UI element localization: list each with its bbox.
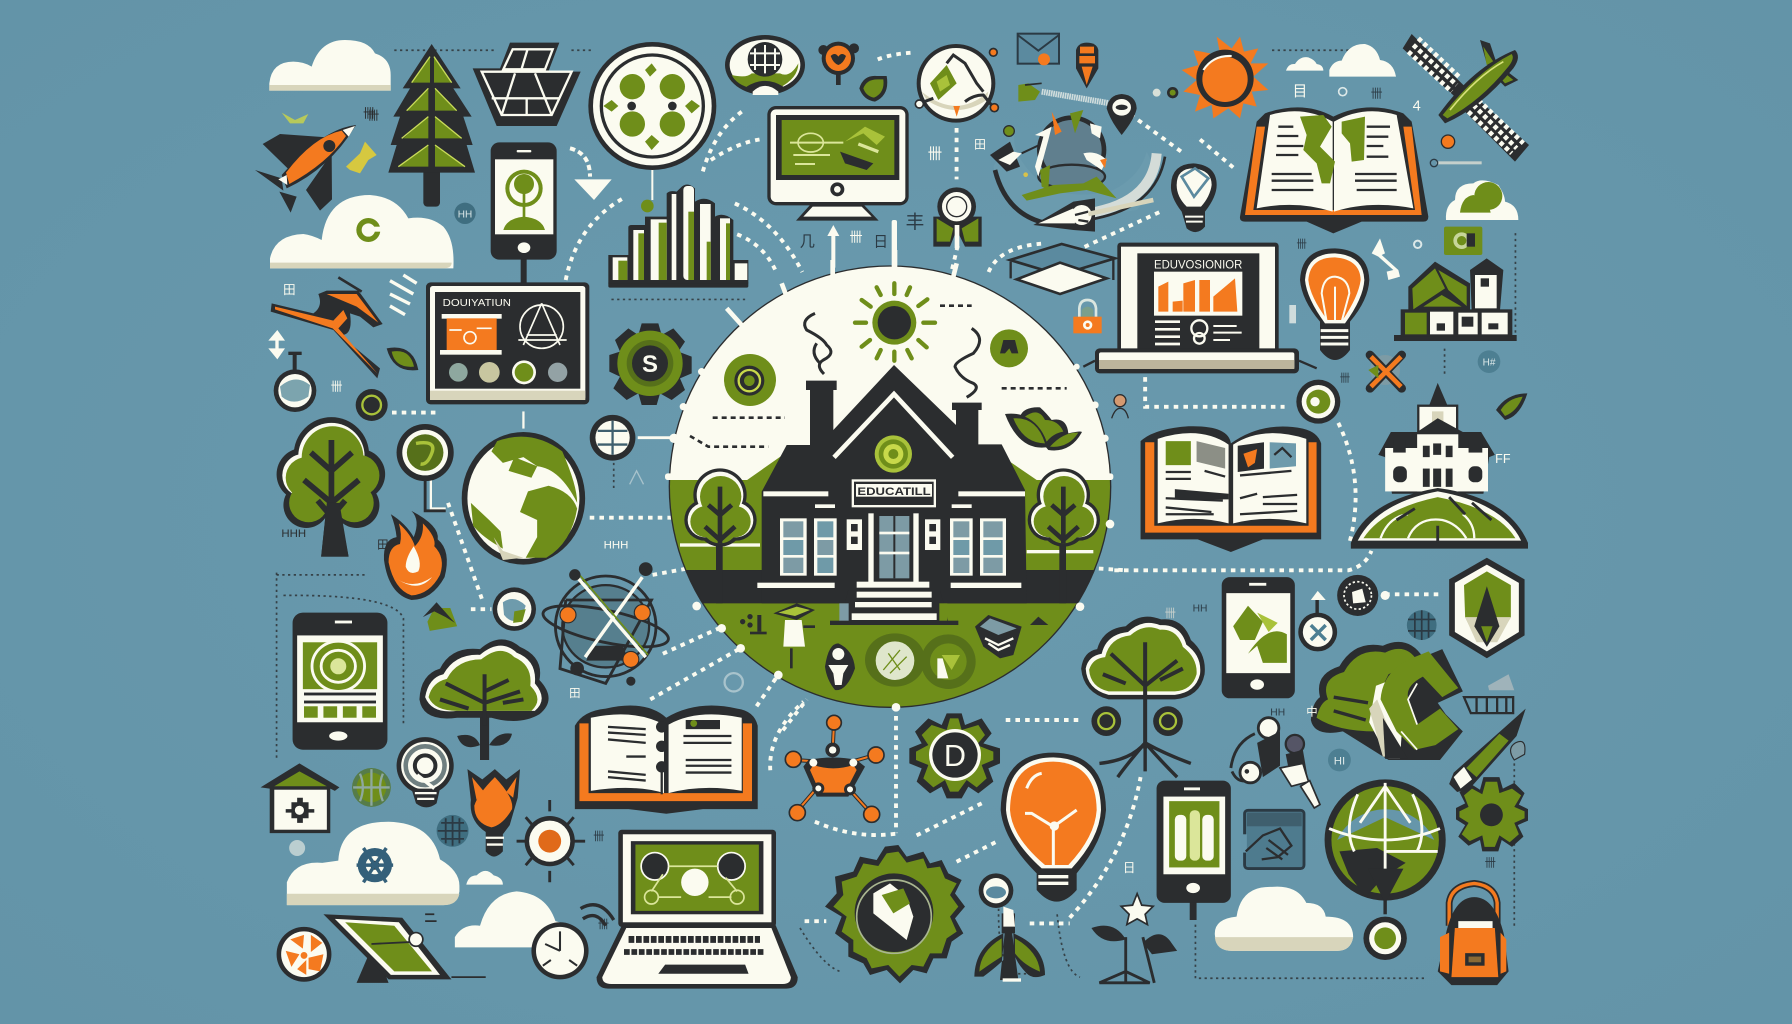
- tiny marks: [283, 108, 379, 394]
- shelf: [1464, 674, 1514, 713]
- white bulb: [1171, 163, 1217, 232]
- door: [857, 513, 929, 588]
- lens pointer: [1298, 591, 1337, 651]
- round chip: HH: [458, 209, 472, 220]
- farm buildings: [1394, 258, 1517, 341]
- windows: [780, 518, 1006, 576]
- double arrow: [268, 330, 285, 359]
- small cloud: [466, 871, 503, 885]
- green tree and gear letter C: [1311, 642, 1463, 760]
- solar panel lower: [323, 914, 486, 983]
- tiny marks: [800, 137, 986, 251]
- lens: [274, 352, 316, 412]
- orange sun: [1182, 37, 1268, 118]
- large mesh globe: [1325, 779, 1446, 914]
- gear D: D: [944, 739, 966, 773]
- school building: [740, 365, 1042, 625]
- tiny marks: 日: [873, 235, 888, 251]
- round emblem: [588, 42, 716, 212]
- handshake panel: [1241, 810, 1304, 869]
- tiny marks: 卌: [928, 145, 942, 162]
- tiny marks: 目: [1293, 84, 1307, 100]
- fuzzy eye right: [1153, 706, 1183, 736]
- right open book: [1141, 426, 1321, 552]
- envelope: [1018, 34, 1059, 65]
- clock: [531, 922, 589, 979]
- tiny marks: 卌: [367, 108, 379, 122]
- rocket plane: [255, 125, 356, 213]
- laptop with chart: EDUVOSIONIOR: [1154, 257, 1243, 271]
- heart pin: [818, 42, 859, 85]
- left tree: [277, 417, 385, 557]
- down arrow: [570, 148, 612, 200]
- sun in hub: [855, 283, 935, 361]
- gear S: S: [642, 351, 658, 378]
- tiny marks: 卌: [849, 230, 863, 245]
- scattered micro marks: 卌: [1165, 607, 1176, 620]
- child figure: [825, 643, 855, 690]
- mini chip: HI: [1334, 756, 1345, 768]
- rim markers: [665, 250, 1114, 712]
- tablet target: [293, 613, 387, 750]
- hexagon badge: [1449, 558, 1525, 658]
- scattered micro marks: HHH: [281, 528, 306, 540]
- map circle: [915, 44, 998, 123]
- tiny marks: 卌: [1296, 238, 1307, 250]
- scattered micro marks: 田: [569, 688, 581, 700]
- satellite: [1403, 34, 1529, 167]
- mini chip: [1328, 749, 1351, 771]
- scattered micro marks: HH: [1270, 707, 1285, 718]
- globe eye bubble: [725, 35, 805, 95]
- orange drone: [271, 277, 383, 378]
- student figure with cap: [773, 603, 815, 668]
- smoke plumes: [805, 313, 980, 397]
- dashboard panel: [426, 282, 589, 404]
- school building: EDUCATILL: [857, 486, 931, 498]
- lower laptop: [597, 830, 798, 989]
- laptop with chart: [1083, 243, 1317, 373]
- scattered micro marks: FF: [1495, 452, 1511, 466]
- cloud top left: [269, 40, 391, 91]
- open book lower: [575, 706, 758, 814]
- lawn badges: [865, 633, 976, 689]
- school on hill: [1351, 383, 1528, 549]
- orange network star: [785, 715, 884, 822]
- olive gear: [1456, 777, 1528, 851]
- gear D: [909, 713, 1000, 798]
- scattered micro marks: 卌: [598, 918, 609, 931]
- small green house glyph: [423, 602, 457, 631]
- carrot badge: [1076, 43, 1098, 88]
- small leaf: [859, 76, 887, 102]
- scattered micro marks: 日: [1123, 861, 1135, 875]
- green badge left: [724, 354, 776, 406]
- up arrow: [827, 225, 839, 268]
- lower cloud: [455, 891, 576, 947]
- scattered micro marks: [281, 107, 1511, 931]
- scattered micro marks: 卌: [363, 107, 375, 121]
- big orange bulb: [1001, 753, 1106, 902]
- map book: [1240, 107, 1428, 233]
- right phone: [1222, 577, 1295, 698]
- small globe lens: [493, 587, 536, 631]
- ring bulb: [397, 737, 454, 807]
- teardrop pin: [1107, 94, 1137, 135]
- tiny marks: 4: [1413, 99, 1421, 115]
- orange dot: [989, 48, 998, 57]
- small mesh lens by hub: [590, 415, 635, 461]
- cloud with logo: [270, 195, 454, 268]
- small globe with connector: [397, 424, 454, 511]
- backpack: [1438, 883, 1509, 985]
- leaves: [1005, 407, 1082, 450]
- cloud with gear: [287, 822, 459, 905]
- solar panel top: [473, 43, 581, 126]
- clouds small: [1286, 44, 1396, 77]
- tiny marks: 几: [800, 234, 815, 251]
- leaf right: [1496, 393, 1527, 420]
- dashboard panel: DOUIYATIUN: [443, 298, 511, 309]
- grad box on lawn: [975, 615, 1022, 658]
- dashed marks: [690, 306, 1067, 447]
- chip globe: H#: [1483, 357, 1496, 368]
- person: [1112, 395, 1128, 418]
- large earth globe: [462, 411, 585, 565]
- turbine rocket figure: [974, 873, 1045, 982]
- stripes: [390, 275, 417, 315]
- green globe: [352, 768, 391, 807]
- scattered micro marks: 卌: [593, 830, 605, 843]
- tiny marks: 田: [974, 137, 986, 151]
- small house: [261, 763, 339, 833]
- earth mechanism: [990, 110, 1165, 226]
- flame icon: [384, 511, 447, 600]
- mini trio: [1153, 87, 1178, 98]
- seal green: [1296, 380, 1340, 424]
- dotted connector network: [277, 50, 1515, 978]
- phone top: [491, 142, 557, 283]
- green flag with white trail: [1018, 83, 1110, 103]
- pencil: [1449, 709, 1526, 792]
- round chip: [454, 203, 476, 224]
- scattered micro marks: 卌: [1485, 856, 1496, 869]
- green leaf: [387, 348, 418, 370]
- tiny marks: 卌: [331, 380, 343, 394]
- olive cloud: [1446, 180, 1518, 220]
- tiny marks: [1289, 84, 1421, 385]
- bar chart: [608, 185, 748, 288]
- fuzzy seal: [356, 389, 388, 421]
- scattered micro marks: HHH: [604, 540, 628, 552]
- white arrow squiggle: [1372, 238, 1400, 280]
- graduation cap: [1010, 244, 1115, 294]
- tiny marks: 丰: [906, 211, 924, 232]
- olive tile: [1444, 227, 1482, 255]
- padlock: [1073, 300, 1102, 333]
- scattered micro marks: HH: [1193, 603, 1207, 614]
- scattered micro marks: 田: [377, 540, 389, 552]
- central school hub: [665, 250, 1114, 712]
- green badge right: [990, 329, 1028, 367]
- lawn marks: [740, 614, 1048, 634]
- ring node: [1363, 917, 1407, 960]
- crossed tools: [1368, 355, 1402, 388]
- tree with roots: [1081, 617, 1205, 777]
- orange fruit circle: [277, 927, 331, 982]
- blue globe: [437, 815, 469, 847]
- yellow sparkle shapes: [282, 113, 377, 173]
- mesh globe: [1407, 610, 1437, 640]
- right schoolyard tree: [1028, 468, 1100, 603]
- steps: [830, 590, 958, 625]
- lower right cloud: [1215, 887, 1353, 951]
- tiny marks: 田: [283, 283, 296, 297]
- gear S: [609, 323, 692, 405]
- molecule atom: [540, 562, 672, 686]
- left schoolyard tree: [684, 468, 757, 603]
- dark dotted seal: [1337, 575, 1390, 616]
- wide tree: [419, 639, 549, 760]
- pine tree: [388, 44, 475, 207]
- fuzzy eye left: [1091, 706, 1121, 736]
- arrow head: [1033, 198, 1153, 232]
- desktop monitor: [767, 106, 909, 221]
- large gear globe: [825, 845, 965, 983]
- orange flower bulb: [467, 769, 520, 857]
- microscope tools: [1231, 718, 1320, 808]
- phone lower: [1157, 781, 1231, 920]
- star and sprouts: [1091, 894, 1177, 983]
- scattered micro marks: 中: [1306, 705, 1318, 718]
- tiny marks: 卌: [1340, 373, 1351, 385]
- white post: [892, 220, 897, 268]
- scattered micro marks: ∧: [627, 468, 646, 490]
- tiny marks: 卌: [1371, 86, 1383, 100]
- orange sun small: [517, 800, 585, 882]
- chip globe: [1478, 350, 1500, 373]
- rosette: [933, 187, 982, 248]
- orange bulb: [1300, 248, 1369, 360]
